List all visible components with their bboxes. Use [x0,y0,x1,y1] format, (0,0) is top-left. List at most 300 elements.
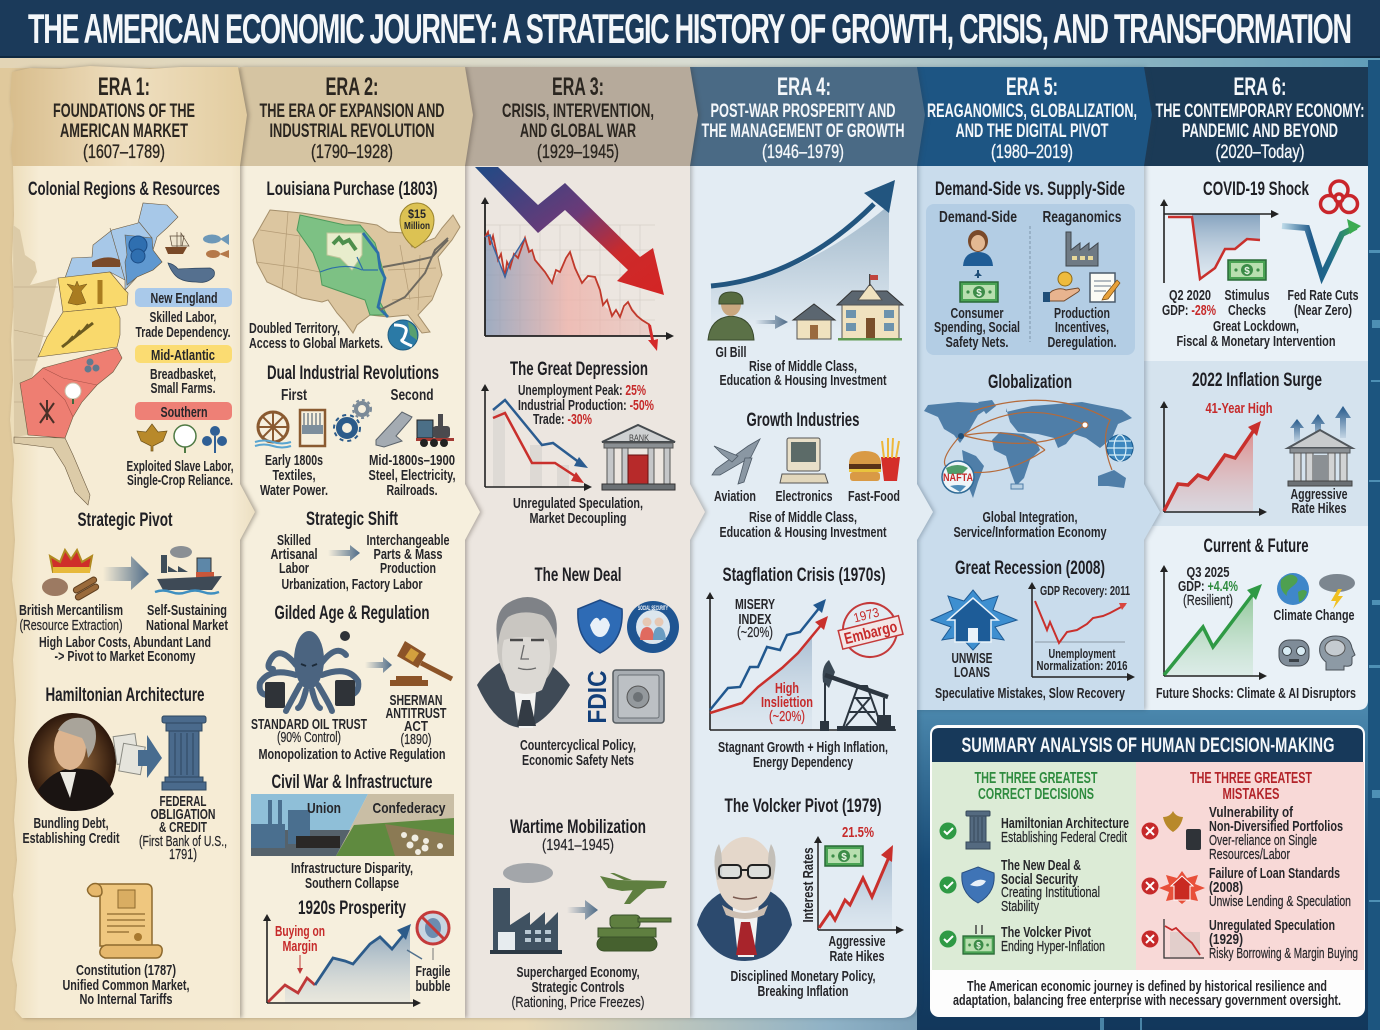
stamp: 1973 embargo [833,596,907,664]
icon: shield [578,600,622,653]
text: production incentives: Deregulation. [1048,335,1116,351]
heading: new deal: The New Deal [534,565,622,586]
item: new deal: Stability [1001,899,1040,915]
era 6 heading [1156,73,1364,163]
text: rate hikes: Aggressive [1290,487,1348,503]
text: standard oil and sherman act: Monopolization to Active Regulation [258,747,446,763]
chart: current GDP: (Resilient) [1183,593,1233,609]
text: hamilton details: & CREDIT [159,820,207,836]
chart: great recession recovery: GDP Recovery: 2011 [1040,584,1130,598]
panel: era 1 [10,66,255,1018]
icon: ship with factory [155,546,222,594]
era 1 parchment background [10,166,255,1018]
era 6 background [1144,166,1368,710]
text: artisanal to mass production: Urbanization, Factory Labor [282,577,423,593]
panel: era 2 [240,67,480,1018]
item: hamiltonian: Hamiltonian Architecture [1001,816,1129,832]
panel: era 4 [690,67,933,1018]
text: standard oil and sherman act: SHERMAN [390,693,442,709]
text: production incentives: Incentives, [1055,320,1109,336]
heading: great depression: The Great Depression [510,359,648,380]
era 1 heading: ERA 1: [98,73,150,101]
text: hamilton details: Establishing Credit [22,831,120,847]
icon: house [793,304,835,339]
icon: collapsing house: LOANS [954,665,990,681]
era 2 background [240,166,480,1018]
era 1 header parchment [10,66,247,166]
chart: interest rates: Rate Hikes [830,949,884,965]
heading: current and future: Current & Future [1204,536,1308,557]
chart: stagflation misery index: (~20%) [769,709,805,725]
summary conclusion [953,979,1341,1009]
text: first and second revolutions: Railroads. [386,483,438,499]
text: first and second revolutions: Mid-1800s–1900 [369,453,455,469]
chart: current GDP [1160,565,1267,680]
chart: interest rates [801,825,904,965]
text: consumer spending [934,306,1020,351]
panel: era 5 [917,67,1160,710]
text: rate hikes [1290,487,1348,517]
item: volcker [1001,925,1105,955]
text: production incentives: Production [1054,306,1110,322]
text: fragile bubble [416,964,450,995]
text: pivot details: (Resource Extraction) [20,618,122,634]
title banner: THE AMERICAN ECONOMIC JOURNEY: A STRATEGIC HISTORY OF GROWTH, CRISIS, AND TRANSFORMATION [28,6,1352,53]
text: unregulated speculation [513,496,643,527]
text: artisanal to mass production [270,533,450,593]
chart: stagflation misery index: INDEX [738,612,772,628]
icon: price marker: Million [404,221,430,232]
era 3 heading: AND GLOBAL WAR [520,121,636,142]
arrow: GI bill to housing [755,315,788,329]
panel: era 6 [1144,67,1368,710]
text: standard oil and sherman act: (1890) [400,732,432,748]
text: stagnant growth [718,740,888,771]
text: consumer spending: Spending, Social [934,320,1020,336]
item: non-diversified: Vulnerability of [1209,805,1293,821]
icon: bank [1288,430,1352,486]
text: infrastructure disparity: Southern Collapse [305,876,399,892]
arrow: factory to weapons [567,900,598,920]
portrait: FDR [477,597,570,728]
labels: growth industries: Fast-Food [848,489,900,505]
chart: 1920s margin bubble: Margin [282,939,318,955]
era 4 heading [702,73,904,163]
text: artisanal to mass production: Parts & Mass [374,547,442,563]
check icons [940,822,956,948]
era 3 header band [465,67,698,166]
panel: greatest correct decisions [932,762,1136,970]
text: countercyclical [520,738,636,769]
text: disciplined policy [730,969,876,1000]
icon: loom [300,410,325,446]
heading: great recession: Great Recession (2008) [955,558,1105,579]
icon: NAFTA globe: NAFTA [943,472,973,484]
text: hamilton details [22,794,227,863]
text: artisanal to mass production: Production [380,561,436,577]
item: new deal: The New Deal & [1001,858,1081,874]
text: fragile bubble: Fragile [416,964,450,980]
text: production incentives [1048,306,1116,351]
era 3 heading: (1929–1945) [537,142,619,163]
icon: document and pencil [1090,273,1120,302]
panel: summary analysis [930,725,1365,1017]
item: non-diversified: Over-reliance on Single [1209,833,1317,849]
text: GI Bill: Education & Housing Investment [720,373,887,389]
chart: great recession recovery [1028,582,1135,681]
era 4 heading: ERA 4: [777,73,831,101]
era 6 middle band [1144,361,1368,526]
icon: price marker: $15 [408,207,426,221]
era 6 header band [1144,67,1368,166]
icon: bundled bonds [113,734,145,775]
stat list: depression [518,383,654,428]
text: artisanal to mass production: Interchangeable [366,533,450,549]
text: southern details: Single-Crop Reliance. [127,473,233,489]
heading: globalization: Globalization [988,372,1072,393]
text: hamilton details: (First Bank of U.S., [139,834,227,850]
icon: falling chart [1164,919,1204,958]
panel: greatest mistakes: THE THREE GREATEST [1190,770,1312,787]
text: GI Bill: GI Bill [716,345,746,361]
chart: interest rates: Aggressive [828,934,886,950]
x icons [1142,822,1158,948]
panel: demand and supply comparison: Demand-Side [939,209,1017,226]
icon: no bubble [417,912,449,960]
item: new deal [1001,858,1100,915]
icon: crown and raw resources [42,550,100,601]
heading: stagflation: Stagflation Crisis (1970s) [722,565,886,586]
item: 1929 speculation: Unregulated Speculation [1209,918,1335,934]
summary header [932,728,1363,762]
text: supercharged economy: Supercharged Economy, [516,965,640,981]
icon: leaf and oil barrel [1163,811,1201,850]
icon: tank [597,915,671,951]
label: southern [135,402,232,421]
panel: greatest mistakes: MISTAKES [1222,786,1280,803]
chart labels: covid: Stimulus [1224,288,1270,304]
text: consumer spending: Consumer [950,306,1004,322]
chart: inflation: 41-Year High [1206,401,1272,417]
text: global integration: Service/Information Economy [954,525,1106,541]
chart: 1920s margin bubble [263,914,422,1007]
text: stagnant growth: Stagnant Growth + High Inflation, [718,740,888,756]
label: southern: Southern [160,405,208,421]
icon: school [837,274,903,340]
panel: demand and supply comparison: Reaganomics [1042,209,1122,226]
heading: Louisiana Purchase: Louisiana Purchase (1803) [266,179,438,200]
heading: wartime mobilization: Wartime Mobilization [510,817,646,838]
icon: burger and fries [849,438,900,481]
text: pivot details: Self-Sustaining [147,603,227,619]
text: hamilton details: 1791) [169,847,197,863]
era 5 heading [927,73,1137,163]
item: volcker: The Volcker Pivot [1001,925,1091,941]
text: hamilton details: FEDERAL [160,794,207,810]
text: countercyclical: Economic Safety Nets [522,753,634,769]
chart: stagflation misery index: MISERY [735,597,775,613]
labels: growth industries: Electronics [776,489,832,505]
era 3 heading [502,73,654,163]
world map with trade routes [924,400,1132,498]
text: hamilton details: Bundling Debt, [34,816,108,832]
text: standard oil and sherman act: STANDARD OIL TRUST [251,717,367,733]
icon: money and house [960,282,998,302]
label: new england: New England [150,291,218,307]
text: disciplined policy: Disciplined Monetary Policy, [730,969,876,985]
era 6 heading: ERA 6: [1234,73,1286,101]
image: union vs confederacy: Confederacy [372,800,446,817]
heading: dual industrial revolutions: Dual Industrial Revolutions [267,363,439,384]
era 5 background [917,166,1160,710]
era 2 heading: (1790–1928) [311,142,393,163]
text: fragile bubble: bubble [416,979,450,995]
stat list: depression: Trade: -30% [533,412,592,428]
icon: storm cloud [1319,574,1355,609]
chart labels: covid [1162,288,1358,350]
text: climate change: Climate Change [1274,608,1354,624]
heading: civil war: Civil War & Infrastructure [272,772,432,793]
text: disciplined policy: Breaking Inflation [758,984,848,1000]
labels: growth industries [714,489,900,541]
label: new england: Skilled Labor, [150,310,216,326]
era 4 heading: POST-WAR PROSPERITY AND [710,101,896,122]
chart labels: covid: Checks [1228,303,1266,319]
text: global integration: Global Integration, [982,510,1078,526]
text: pivot details: -> Pivot to Market Economy [54,649,196,665]
icon: oil pump [821,660,894,730]
chart: current GDP: Q3 2025 [1186,565,1230,581]
panel: greatest correct decisions: CORRECT DECISIONS [978,786,1094,803]
text: first and second revolutions [260,453,456,499]
era 2 header band [240,67,473,166]
icons: tobacco cotton indigo [137,424,227,453]
text: southern details [126,459,234,489]
era 3 heading: ERA 3: [552,73,604,101]
era 1 heading: FOUNDATIONS OF THE [53,101,195,122]
heading: colonial regions: Colonial Regions & Resources [28,179,220,200]
icon: price marker [400,203,434,248]
item: 1929 speculation: (1929) [1209,932,1243,948]
text: supercharged economy: (Rationing, Price Freezes) [512,995,644,1011]
label: mid-atlantic [135,345,232,397]
text: constitution [62,963,190,1008]
text: pivot details: British Mercantilism [19,603,123,619]
item: volcker: Ending Hyper-Inflation [1001,939,1105,955]
item: loan standards: (2008) [1209,880,1243,896]
icon: NAFTA globe [942,461,974,493]
era 6 heading: (2020–Today) [1216,142,1304,163]
chart: covid gdp drop [1160,199,1279,283]
panel: greatest mistakes [1136,762,1364,970]
label: mid-atlantic: Breadbasket, [150,367,216,383]
chart: inflation [1160,401,1272,516]
growth curve arrow [711,180,895,330]
icon: constitution scroll [88,884,162,958]
text: doubled territory: Access to Global Markets. [249,336,383,352]
chart: great recession recovery: Normalization: 2016 [1036,659,1128,673]
text: pivot details [19,603,228,665]
icon: gears [334,400,371,441]
era 2 heading [260,73,444,163]
label: mid-atlantic: Mid-Atlantic [151,348,215,364]
item: new deal: Social Security [1001,872,1078,888]
heading: hamiltonian architecture: Hamiltonian Architecture [46,685,204,706]
era 1 heading [53,73,195,163]
text: GI Bill: Rise of Middle Class, [749,359,857,375]
heading: wartime mobilization: (1941–1945) [542,837,614,854]
text: standard oil and sherman act: (90% Control) [277,730,341,746]
text: standard oil and sherman act: ANTITRUST [386,706,447,722]
text: doubled territory [249,321,383,352]
map: colonial regions [13,203,178,505]
era 2 heading: THE ERA OF EXPANSION AND [260,101,444,122]
text: artisanal to mass production: Labor [279,561,309,577]
big crash arrow [475,167,664,295]
text: constitution: No Internal Tariffs [80,992,172,1008]
text: pivot details: National Market [146,618,228,634]
heading: strategic pivot: Strategic Pivot [78,510,173,531]
text: doubled territory: Doubled Territory, [249,321,340,337]
icon: robot [1279,640,1309,666]
icon: factory [1066,232,1098,266]
labels: growth industries: Education & Housing Investment [720,525,887,541]
text: first and second revolutions: Water Power. [260,483,328,499]
arrow: mercantilism to market [103,556,149,590]
icon: bank with red doors [602,425,675,490]
text: supercharged economy: Strategic Controls [532,980,624,996]
icon: column [966,811,990,849]
item: 1929 speculation [1209,918,1358,962]
chart: 1920s margin bubble: Buying on [275,924,325,940]
icon: bank with red doors: BANK [629,433,649,443]
text: countercyclical: Countercyclical Policy, [520,738,636,754]
text: global integration [954,510,1106,541]
item: non-diversified [1209,805,1343,863]
arrow: debt to federal credit [138,735,162,778]
text: first and second revolutions: Steel, Electricity, [368,468,456,484]
item: new deal: Creating Institutional [1001,885,1100,901]
icon: fed rate V [1282,219,1361,276]
icon: computer [780,438,828,483]
text: GI Bill [716,345,887,389]
era 2 heading: INDUSTRIAL REVOLUTION [270,121,434,142]
heading: demand vs supply: Demand-Side vs. Supply-Side [935,179,1125,200]
stamp: 1973 embargo: Embargo [843,619,899,648]
icon: globe [1107,435,1133,461]
era 3 heading: CRISIS, INTERVENTION, [502,101,654,122]
text: first and second revolutions: Early 1800s [265,453,323,469]
icon: consumer person [963,230,993,278]
stat list: depression: Unemployment Peak: 25% [518,383,646,399]
era 4 header band [690,67,925,166]
era 3 background [465,166,705,1018]
text: hamilton details: OBLIGATION [150,807,216,823]
chart: interest rates: 21.5% [842,825,874,841]
text: stagnant growth: Energy Dependency [753,755,853,771]
icon: melting earth [1277,573,1309,605]
chart: market crash [481,197,674,351]
label: new england [135,288,232,341]
subheads: first and second [281,387,434,404]
chart: stagflation misery index: (~20%) [737,625,773,641]
chart: stagflation misery index: Insliettion [761,695,813,711]
icon: brain head [1320,636,1355,670]
labels: growth industries: Aviation [714,489,756,505]
heading: gilded age: Gilded Age & Regulation [274,603,430,624]
icon: bursting house [1159,871,1205,904]
era 4 background [690,166,933,1018]
chart labels: covid: (Near Zero) [1294,303,1352,319]
icon: collapsing house: UNWISE [952,651,993,667]
labels: growth industries: Rise of Middle Class, [749,510,857,526]
text: pivot details: High Labor Costs, Abundant Land [39,635,211,651]
icon: rate hike arrows [1290,406,1351,442]
text: supercharged economy [512,965,644,1011]
icon: biohazard [1320,181,1358,212]
text: first and second revolutions: Textiles, [272,468,316,484]
heading: strategic shift: Strategic Shift [306,509,398,530]
image: union vs confederacy: Union [307,800,341,817]
chart: great recession recovery: Unemployment [1048,647,1116,661]
icon: soldier [708,292,754,340]
era 5 heading: (1980–2019) [991,142,1073,163]
era 1 heading: AMERICAN MARKET [60,121,188,142]
portrait: Paul Volcker [697,837,792,961]
era 5 header band [917,67,1152,166]
era 4 heading: THE MANAGEMENT OF GROWTH [702,121,904,142]
text: rate hikes: Rate Hikes [1292,501,1346,517]
panel: era 3 [465,67,705,1018]
icon: money and arrows [963,925,994,954]
stat list: depression: Industrial Production: -50% [518,398,654,414]
chart: stagflation misery index: High [775,681,799,697]
icon: hand with coin [1043,272,1080,302]
icon: federal column [162,716,206,790]
arrow: trust to regulation [365,657,392,673]
text: infrastructure disparity: Infrastructure Disparity, [291,861,413,877]
chart: depression decline [481,384,592,491]
text: infrastructure disparity [291,861,413,892]
text: unregulated speculation: Market Decoupling [530,511,626,527]
era 5 heading: AND THE DIGITAL PIVOT [956,121,1109,142]
icon: octopus with oil barrels [260,631,358,711]
icon: stimulus money [1228,260,1266,280]
text: consumer spending: Safety Nets. [946,335,1008,351]
text: unregulated speculation: Unregulated Speculation, [513,496,643,512]
chart labels: covid: GDP: -28% [1162,303,1216,319]
item: loan standards [1209,866,1351,910]
heading: 1920s prosperity: 1920s Prosperity [298,898,406,919]
era 5 heading: REAGANOMICS, GLOBALIZATION, [927,101,1137,122]
text: speculative mistakes: Speculative Mistakes, Slow Recovery [935,686,1125,702]
heading: growth industries: Growth Industries [746,410,860,431]
era 4 heading: (1946–1979) [762,142,844,163]
icon: war factory [490,863,562,954]
text: constitution: Unified Common Market, [62,978,190,994]
item: hamiltonian: Establishing Federal Credit [1001,830,1127,846]
label: mid-atlantic: Small Farms. [150,381,216,397]
era 2 heading: ERA 2: [326,73,378,101]
heading: wartime mobilization [510,817,646,854]
text: standard oil and sherman act: ACT [404,719,428,735]
icon: steel beam [376,412,412,447]
icon: ship fish and whale [165,232,229,282]
icon: shield [962,867,994,903]
icon: jet [712,439,760,484]
heading: volcker pivot: The Volcker Pivot (1979) [724,796,882,817]
icon: social security badge: SOCIAL SECURITY [638,605,668,612]
